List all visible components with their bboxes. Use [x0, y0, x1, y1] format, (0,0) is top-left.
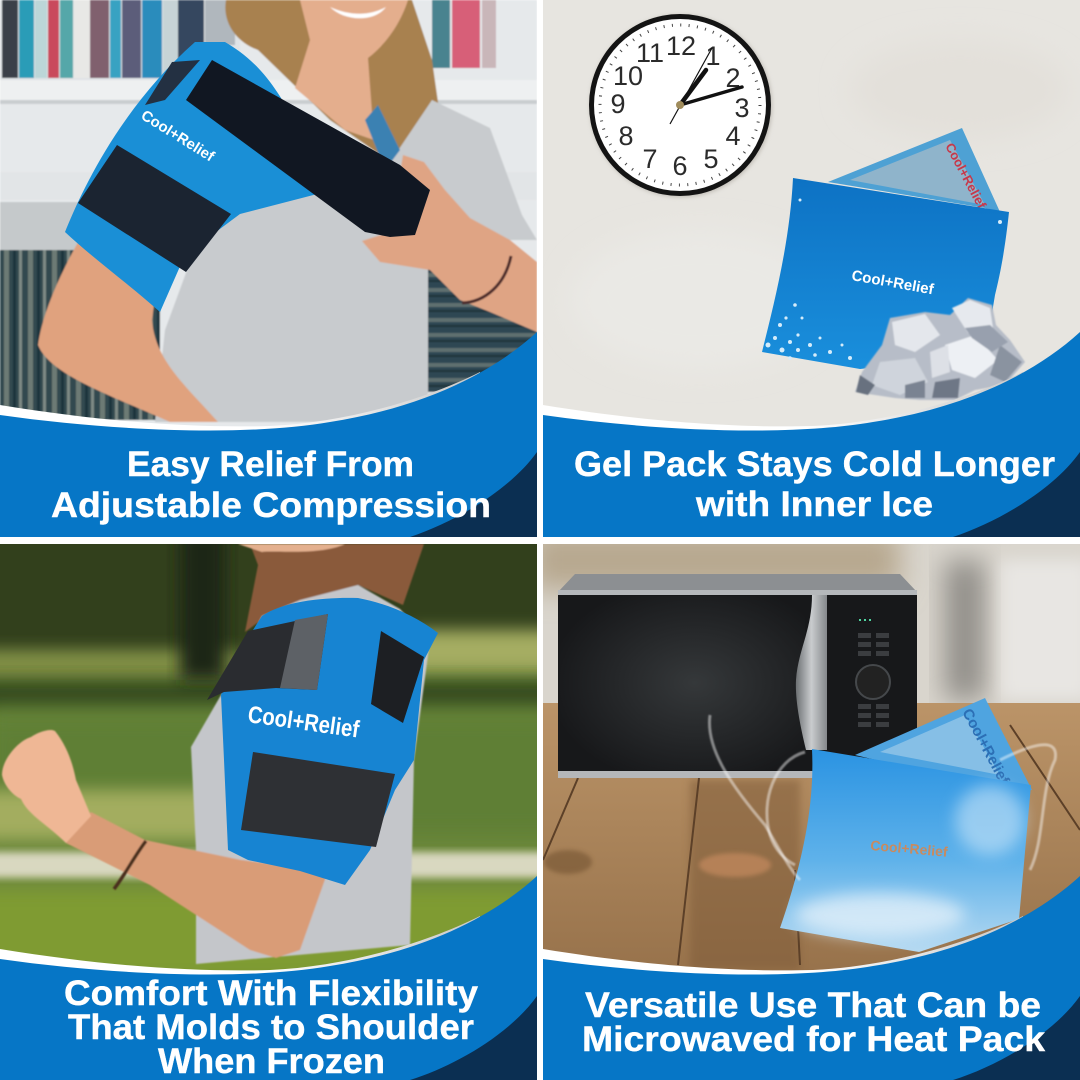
door handle: [796, 595, 827, 750]
heading: flexibility: That Molds to Shoulder: [68, 1008, 474, 1047]
heading: microwave use: Versatile Use That Can be: [585, 986, 1041, 1025]
control knob: [856, 665, 890, 699]
icon: inner gel pack: Cool+Relief: [942, 140, 990, 211]
heading: stays cold longer: with Inner Ice: [695, 485, 933, 524]
icon: inner gel pack: Cool+Relief: [958, 706, 1013, 788]
icon: wall clock: 11: [636, 38, 664, 68]
banner: [0, 332, 537, 537]
heading: adjustable compression: Easy Relief From: [127, 445, 414, 484]
panel: microwave heat pack: [530, 530, 1080, 1080]
photo: plaster wall background: [543, 0, 1080, 426]
heading: stays cold longer: [575, 450, 1055, 516]
steam wisps: [709, 715, 1056, 880]
vents: [858, 633, 889, 727]
icon: blue gel pack sleeve: Cool+Relief: [850, 267, 936, 299]
icon: wall clock: 12: [666, 31, 696, 61]
shoulder strap: [207, 614, 328, 700]
heading: flexibility: [65, 979, 478, 1074]
heading: stays cold longer: Gel Pack Stays Cold Longer: [574, 445, 1055, 484]
left arm: [36, 243, 218, 422]
black adjustment strap: [186, 60, 430, 237]
icon: wall clock: 8: [618, 121, 634, 151]
icon: inner gel pack: [855, 698, 1032, 790]
icon: ice cubes: [855, 298, 1025, 400]
heading: flexibility: Comfort With Flexibility: [64, 974, 479, 1013]
grey t-shirt: [191, 585, 430, 964]
icon: inner gel pack: [828, 128, 1000, 212]
icon: wall clock: 9: [610, 89, 626, 119]
mesh arm band: [78, 145, 231, 272]
photo: blurred kitchen background and wood table: [530, 530, 1080, 983]
panel: gel pack stays cold: [543, 0, 1080, 537]
icon: wall clock: 4: [725, 121, 741, 151]
indicator lights: [859, 619, 871, 621]
heading: adjustable compression: [51, 445, 491, 525]
icon: wall clock: 2: [725, 63, 741, 93]
icon: blue shoulder wrap with straps: [65, 42, 430, 312]
banner: [543, 332, 1080, 537]
face and neck: [295, 0, 408, 140]
icon: wall clock: 7: [642, 144, 658, 174]
banner: [543, 876, 1080, 1080]
panel: adjustable compression: [0, 0, 537, 537]
hair: [245, 544, 424, 632]
photo: woman adjusting shoulder wrap: [0, 0, 537, 426]
fist: [2, 730, 91, 843]
photo: woman with wrap on shoulder: [2, 544, 430, 964]
arm strap: [241, 752, 395, 847]
back strap: [371, 631, 424, 723]
icon: wall clock: [589, 14, 772, 197]
banner: [0, 876, 537, 1080]
icon: wall clock: 5: [703, 144, 719, 174]
panel: flexibility: [0, 544, 537, 1080]
logo on wrap: Cool+Relief: [138, 107, 218, 166]
heading: microwave use: Microwaved for Heat Pack: [582, 1020, 1046, 1059]
icon: blue wrap with straps: [207, 598, 438, 885]
forearm and upper arm: [66, 812, 328, 958]
icon: wall clock: 6: [672, 151, 688, 181]
grey t-shirt: [155, 100, 537, 422]
icon: wall clock: 3: [734, 93, 750, 123]
icon: microwave oven: [558, 574, 917, 778]
heading: adjustable compression: Adjustable Compression: [51, 486, 491, 525]
frost specks: [766, 198, 1002, 360]
right arm and hand: [362, 155, 537, 332]
heading: flexibility: When Frozen: [158, 1042, 385, 1080]
photo: blurred park background: [0, 544, 537, 970]
hair: [225, 0, 442, 165]
icon: blue gel pack sleeve: [762, 178, 1009, 369]
icon: wall clock: 1: [705, 41, 721, 71]
icon: wall clock: 10: [613, 61, 643, 91]
heading: microwave use: [582, 986, 1046, 1059]
icon: blue gel pack with steam: [709, 715, 1056, 952]
icon: blue gel pack with steam: Cool+Relief: [870, 837, 949, 860]
logo on wrap: Cool+Relief: [246, 701, 362, 744]
